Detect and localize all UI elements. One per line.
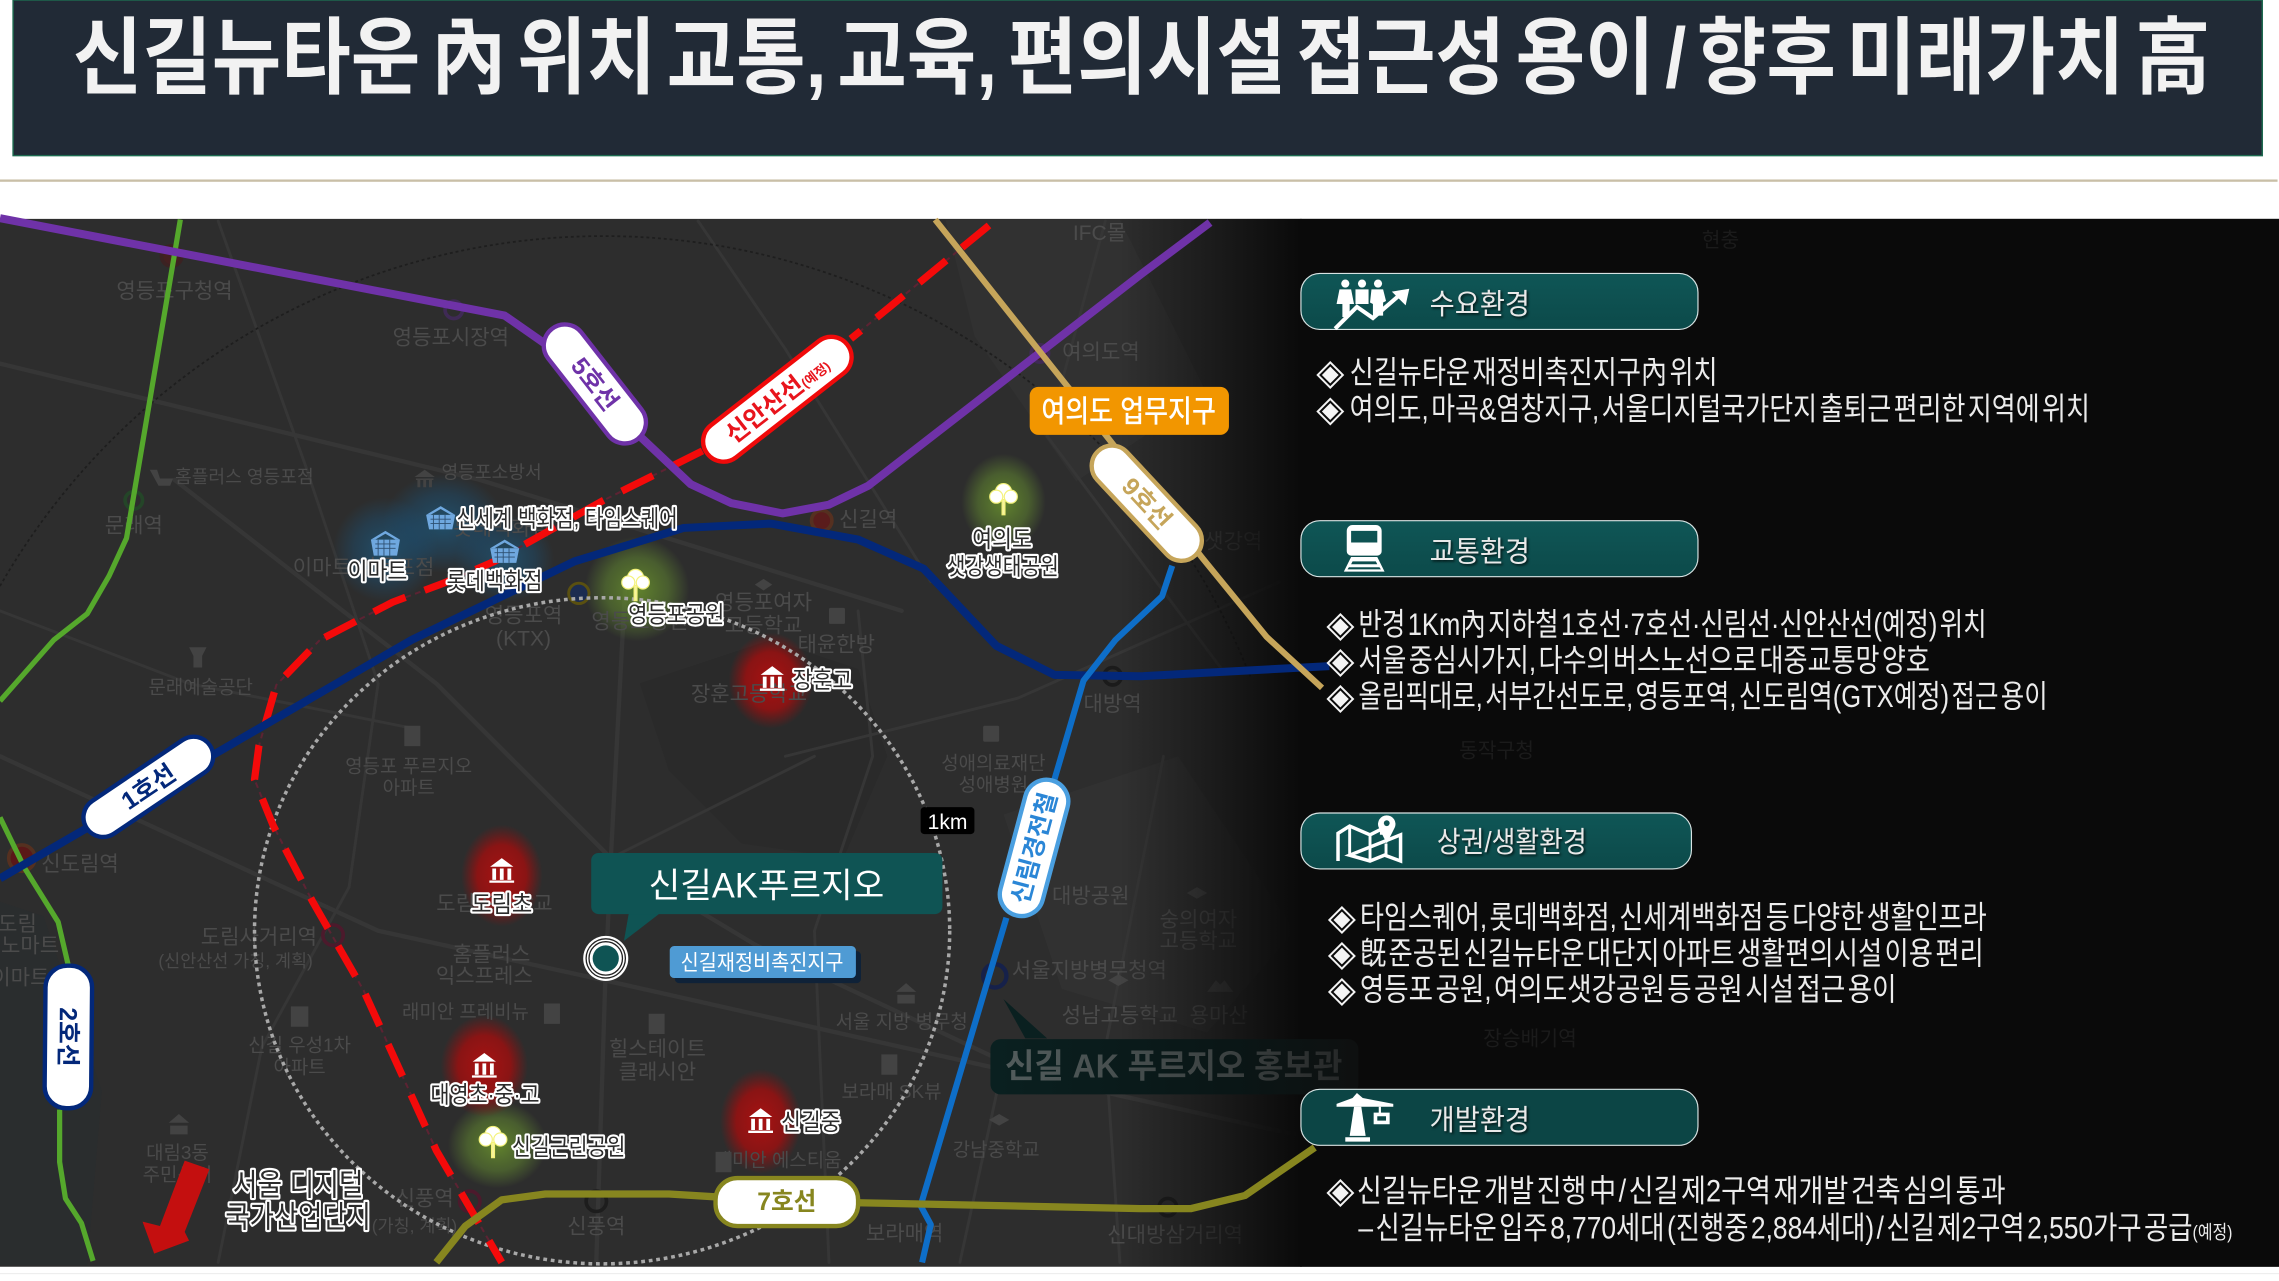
line 1: [0, 524, 1329, 878]
line 9: [935, 220, 1322, 688]
badge: 신안산선(예정): [695, 329, 860, 470]
line 7: [436, 1147, 1315, 1262]
faint map labels: 신길역: [839, 507, 897, 531]
faint map labels: (가칭, 계획): [372, 1216, 457, 1236]
text block: 영등포 공원, 여의도샛강공원 등 공원 시설 접근 용이: [1360, 972, 1897, 1007]
heading text: 수요환경: [1430, 289, 1530, 321]
faint map labels: 장훈고등학교: [691, 682, 807, 706]
badge: 1호선: 1호선: [116, 759, 181, 816]
panel: 수요환경: [1301, 273, 2090, 429]
icon: crane: [1337, 1093, 1393, 1142]
heading pill: [1301, 1089, 1698, 1145]
faint map labels: 태윤한방: [797, 633, 875, 657]
faint map labels: 힐스테이트: [609, 1037, 706, 1061]
badge: 신안산선(예정): 신안산선(예정): [720, 351, 835, 449]
title bar: [13, 0, 2262, 156]
heading text: 상권/생활환경: [1437, 826, 1587, 859]
map place labels: 도림초: [471, 891, 532, 917]
faint map labels: 롯데백화점: [453, 516, 550, 540]
faint map labels: 신풍역: [396, 1187, 454, 1211]
badge: 2호선: [44, 965, 92, 1108]
faint map labels: 보라매역: [866, 1222, 943, 1246]
faint map labels: (KTX): [496, 628, 551, 651]
faint map labels: 고등학교: [1160, 929, 1237, 953]
faint map labels: 샛강역: [1204, 529, 1262, 553]
faint map labels: 아파트: [383, 777, 435, 799]
label: 여의도 업무지구: [1030, 387, 1229, 435]
text block: 타임스퀘어, 롯데백화점, 신세계백화점 등 다양한 생활인프라: [1360, 900, 1987, 935]
text block: [1326, 603, 2048, 716]
station rings: [9, 246, 1177, 1216]
text block: 旣 준공된 신길뉴타운 대단지 아파트 생활편의시설 이용 편리: [1360, 936, 1984, 971]
text block: 여의도, 마곡&염창지구, 서울디지털국가단지 출퇴근 편리한 지역에 위치: [1350, 392, 2090, 427]
faint map labels: 영등포시장역: [393, 326, 509, 350]
faint map labels: 문래예술공단: [149, 677, 253, 699]
faint map labels: 신도림역: [41, 852, 119, 876]
badge: 9호선: 9호선: [1116, 472, 1177, 535]
faint map labels: 익스프레스: [436, 964, 533, 988]
map place labels: 샛강생태공원: [947, 553, 1059, 579]
map place labels: 영등포공원: [628, 601, 724, 627]
text block: 신길뉴타운 재정비촉진지구內 위치: [1350, 355, 1718, 390]
faint map labels: 용마산: [1190, 1003, 1248, 1027]
badge: 7호선: [716, 1178, 858, 1226]
faint map labels: 홈플러스 영등포점: [175, 467, 314, 487]
faint map labels: 성애의료재단: [941, 752, 1045, 774]
faint map labels: 서울지방병무청역: [1012, 958, 1167, 982]
faint map labels: 도림사거리역: [201, 925, 317, 949]
faint map labels: 홈플러스: [453, 942, 530, 966]
heading text: 교통환경: [1430, 536, 1530, 568]
faint map labels: 영등포소방서: [441, 462, 542, 482]
faint map labels: 신길 우성1차: [248, 1035, 351, 1057]
text block: 반경 1Km內 지하철 1호선·7호선·신림선·신안산선(예정) 위치: [1358, 607, 1987, 642]
shinansan line: [255, 225, 989, 1262]
faint labels in dark panel: 현충: [1702, 229, 1739, 252]
faint map labels: 대방역: [1084, 692, 1142, 716]
map place labels: 이마트: [348, 558, 407, 584]
heading pill: [1301, 813, 1691, 869]
faint map labels: 영등포역: [485, 603, 562, 627]
badge: 9호선: [1083, 437, 1210, 569]
faint map labels: 신풍역: [567, 1214, 625, 1238]
map place labels: 대영초·중·고: [430, 1081, 540, 1107]
icon: school 신길중: [748, 1108, 773, 1133]
faint map labels: 래미안 에스티움: [715, 1149, 842, 1171]
text block: ◈: [1328, 933, 1356, 974]
line 5: [0, 218, 1210, 513]
text block: ◈: [1326, 640, 1354, 681]
faint map labels: 성남고등학교: [1062, 1003, 1178, 1027]
map place labels: 여의도: [972, 526, 1032, 552]
label: 서울 디지털 국가산업단지: 국가산업단지: [225, 1200, 371, 1234]
faint map labels: IFC몰: [1073, 222, 1126, 245]
text block: 올림픽대로, 서부간선도로, 영등포역, 신도림역(GTX예정) 접근 용이: [1358, 679, 2048, 714]
1km tag: [921, 807, 974, 834]
faint map labels: 고등학교: [725, 614, 802, 638]
text block: ◈: [1316, 388, 1344, 429]
icon: people and rising arrow: [1337, 280, 1409, 327]
icon: map with pin: [1338, 815, 1401, 861]
callout: 신길AK푸르지오: [591, 853, 942, 941]
faint map labels: 보라매 SK뷰: [842, 1081, 942, 1103]
icon: school 장훈고: [760, 666, 785, 691]
badge: 5호선: [535, 316, 654, 452]
label: 여의도 업무지구: 여의도 업무지구: [1041, 395, 1216, 429]
faint map labels: 클래시안: [619, 1060, 696, 1084]
map place labels: 신길중: [781, 1109, 841, 1135]
faint labels in dark panel: 장승배기역: [1483, 1028, 1577, 1051]
faint map labels: 신대방삼거리역: [1107, 1223, 1243, 1247]
icon: basket 이마트: [371, 531, 400, 556]
blue glow: shopping: [333, 474, 554, 602]
faint labels in dark panel: 동작구청: [1459, 740, 1534, 763]
faint map labels: 영등포 푸르지오: [345, 755, 472, 777]
faint map labels: 래미안 프레비뉴: [402, 1001, 529, 1023]
label: 서울 디지털 국가산업단지: 서울 디지털: [233, 1168, 364, 1202]
faded callout: 신길 AK 푸르지오 홍보관: [990, 999, 1358, 1094]
label: 신길재정비촉진지구: 신길재정비촉진지구: [681, 950, 844, 975]
faint map labels: (신안산선 가칭, 계획): [158, 951, 313, 971]
badge: 신림경전철: [995, 775, 1073, 921]
map place labels: 신세계 백화점, 타임스퀘어: [457, 505, 678, 531]
sillim line: [921, 566, 1172, 1262]
text block: [1328, 896, 1987, 1009]
text block: ◈: [1326, 603, 1354, 644]
icon: school 도림초: [489, 858, 514, 883]
text block: ◈: [1328, 968, 1356, 1009]
faint map labels: 대림3동: [146, 1142, 209, 1164]
badge: 2호선: 2호선: [53, 1007, 82, 1067]
faint map labels: 주민센터: [143, 1164, 212, 1186]
faint map labels: 서울 지방 병무청: [836, 1011, 968, 1033]
badge: 신림경전철: 신림경전철: [1007, 790, 1063, 906]
panel: 상권/생활환경: [1301, 813, 1987, 1009]
red glow: schools: [441, 633, 813, 1174]
text block: ◈: [1326, 1170, 1354, 1211]
faint map labels: 영등포구청역: [116, 279, 233, 303]
dark gradient over map: [1120, 219, 1302, 1267]
faint map icons: [150, 470, 1233, 1172]
line 2: [0, 220, 180, 1261]
faint map labels: 여의도역: [1062, 340, 1140, 364]
badge: 7호선: 7호선: [757, 1188, 816, 1216]
label: 서울 디지털 국가산업단지: [225, 1168, 371, 1234]
faint map labels: 성애병원: [959, 774, 1028, 796]
faint map labels: 숭의여자: [1160, 907, 1237, 931]
subway lines: [0, 218, 1329, 1262]
icon: tree 영등포공원: [622, 569, 649, 601]
callout: 신길AK푸르지오: 신길AK푸르지오: [649, 866, 884, 905]
text block: [1316, 352, 2090, 429]
text block: [1326, 1170, 2232, 1245]
text block: ◈: [1328, 896, 1356, 937]
faint map labels: 영등포여자: [715, 590, 812, 614]
map place labels: 신길근린공원: [512, 1134, 625, 1160]
faint map labels: 도림초등학교: [436, 891, 553, 915]
label: 신길재정비촉진지구: [670, 946, 861, 983]
arrow: toward digital complex: [143, 1161, 209, 1254]
map place labels: 장훈고: [793, 667, 852, 693]
faint map labels: [0, 222, 1262, 1247]
text block: ◈: [1326, 675, 1354, 716]
faint labels in dark panel: [1459, 229, 1739, 1051]
faint map labels: 강남중학교: [953, 1139, 1040, 1161]
faded callout: 신길 AK 푸르지오 홍보관: 신길 AK 푸르지오 홍보관: [1005, 1049, 1342, 1086]
heading pill: [1301, 521, 1698, 577]
heading text: 개발환경: [1430, 1105, 1530, 1137]
badge: 5호선: 5호선: [565, 352, 624, 416]
marker: site location: [583, 936, 628, 981]
map place labels: 롯데백화점: [446, 568, 542, 594]
icon: train: [1344, 525, 1385, 572]
icon: school 대영: [472, 1053, 497, 1078]
faint map labels: 대방공원: [1052, 884, 1130, 908]
panel: 개발환경: [1301, 1089, 2232, 1245]
text block: 신길뉴타운 개발 진행 中 / 신길 제2구역 재개발 건축 심의 통과: [1357, 1173, 2006, 1208]
icon: basket 롯데: [490, 540, 519, 563]
heading pill: [1301, 273, 1698, 329]
faint map labels: 영등포공원: [591, 609, 688, 633]
text block: ◈: [1316, 352, 1344, 393]
badge: 1호선: [76, 729, 221, 845]
faint map labels: 아파트: [274, 1056, 326, 1078]
faint map labels: 이마트 영등포점: [293, 555, 434, 579]
icon: tree 신길근린공원: [479, 1126, 507, 1158]
icon: basket 신세계: [426, 506, 455, 529]
1km radius circle: [255, 598, 950, 1264]
panel: 교통환경: [1301, 521, 2048, 716]
icon: tree 여의도: [990, 484, 1017, 515]
map place labels: [348, 505, 1059, 1160]
green glow: parks: [448, 454, 1046, 1188]
faint map labels: 문래역: [105, 513, 163, 537]
text block: 서울 중심시가지, 다수의 버스노선으로 대중교통망 양호: [1358, 643, 1930, 678]
1km tag: 1km: [928, 811, 967, 834]
right dark panel: [1300, 219, 2279, 1267]
